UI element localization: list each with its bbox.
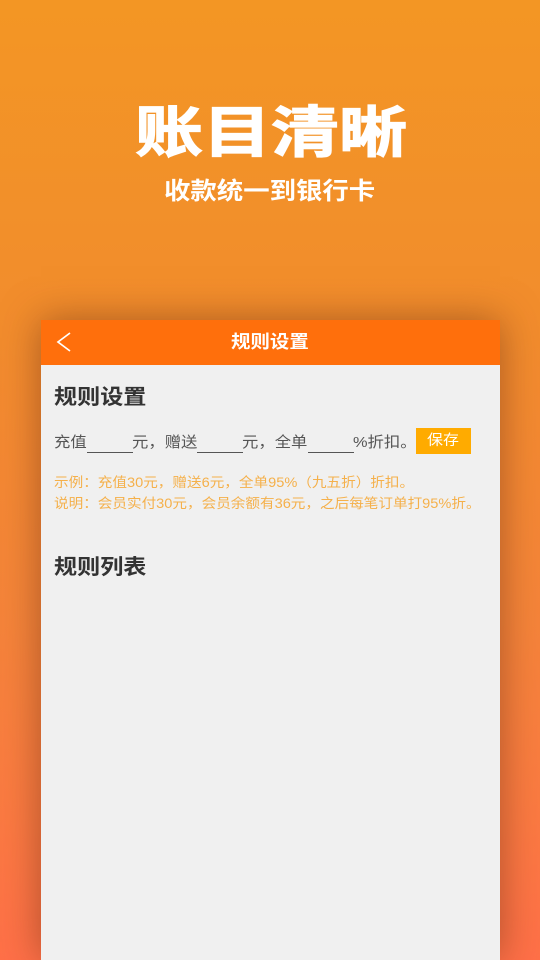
panel: nav bar (41, 320, 500, 365)
label: recharge: 充值 (54, 434, 87, 451)
save button (416, 428, 471, 454)
heading: rule settings: 规则设置 (54, 386, 146, 409)
label: yuan and bonus: 元，赠送 (132, 434, 197, 451)
explanation text: 说明：会员实付30元，会员余额有36元，之后每笔订单打95%折。 (54, 496, 481, 511)
nav title: 规则设置 (231, 332, 309, 352)
form row (54, 434, 417, 451)
icon: back arrow (56, 332, 70, 352)
button label: 保存 (427, 433, 459, 449)
label: percent discount: %折扣。 (353, 434, 417, 451)
label: yuan and discount: 元，全单 (242, 434, 307, 451)
subtitle: 收款统一到银行卡 (164, 178, 375, 205)
panel: phone screen (41, 320, 500, 960)
example text: 示例：充值30元，赠送6元，全单95%（九五折）折扣。 (54, 475, 414, 490)
heading: rule list: 规则列表 (54, 556, 146, 579)
title: 账目清晰 (135, 102, 407, 164)
